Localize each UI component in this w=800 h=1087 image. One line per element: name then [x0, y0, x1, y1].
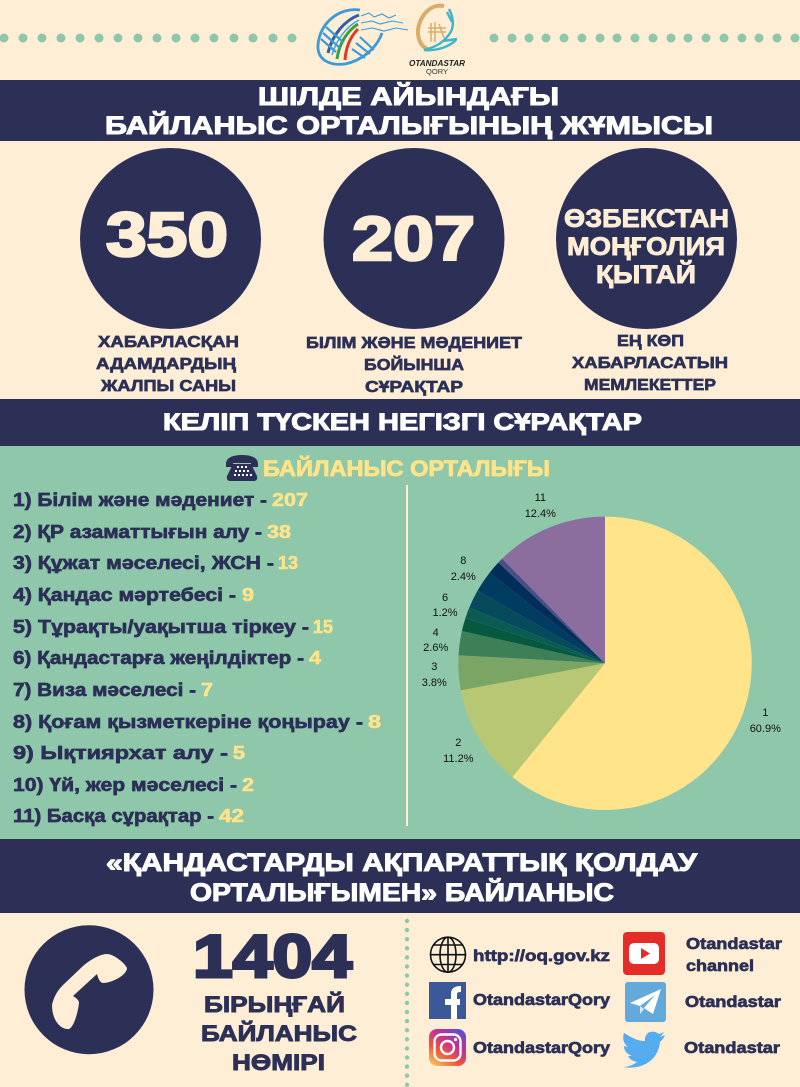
- pie chart: [422, 492, 781, 810]
- youtube handle: [686, 936, 782, 975]
- section banner: main questions: КЕЛІП ТҮСКЕН НЕГІЗГІ СҰРАҚТАР: [163, 409, 642, 436]
- title banner: [0, 80, 800, 141]
- title banner: БАЙЛАНЫС ОРТАЛЫҒЫНЫҢ ЖҰМЫСЫ: [105, 110, 713, 140]
- question list: 9) Ықтиярхат алу -: [13, 743, 228, 763]
- stat: 207: 207: [352, 205, 475, 274]
- logo: Otandastar Qory: QORY: [426, 67, 448, 76]
- pie labels: 2.6%: [423, 642, 448, 654]
- logo: Otandastar Qory: OTANDASTAR: [409, 59, 465, 68]
- icon: telephone: [226, 455, 258, 481]
- pie labels: [422, 492, 781, 765]
- stat label 3: ХАБАРЛАСАТЫН: [572, 355, 728, 372]
- hotline caption: НӨМІРІ: [232, 1050, 325, 1075]
- title line 1: ШІЛДЕ АЙЫНДАҒЫ: [258, 81, 559, 111]
- pie labels: 1.2%: [432, 607, 458, 619]
- question list: 5: [233, 743, 245, 763]
- stat label 2: БІЛІМ ЖӘНЕ МӘДЕНИЕТ: [306, 335, 522, 352]
- question list: 6) Қандастарға жеңілдіктер -: [13, 648, 304, 668]
- contact banner: ОРТАЛЫҒЫМЕН» БАЙЛАНЫС: [190, 877, 614, 907]
- icon: twitter: [623, 1032, 665, 1068]
- stat: countries: ҚЫТАЙ: [596, 259, 696, 289]
- question list: [13, 490, 381, 826]
- stat label 1: АДАМДАРДЫҢ: [96, 356, 237, 373]
- question list: 4) Қандас мәртебесі -: [13, 585, 236, 605]
- stat: countries: МОҢҒОЛИЯ: [567, 233, 725, 261]
- stat label 3: [572, 333, 728, 394]
- stat label 2: [306, 335, 522, 396]
- question list: 2: [242, 775, 254, 795]
- icon: globe: [430, 937, 466, 972]
- pie labels: 4: [433, 627, 439, 639]
- facebook handle: OtandastarQory: [473, 992, 610, 1009]
- logo: Otandastar Qory: [409, 6, 465, 76]
- question list: 42: [219, 806, 244, 826]
- icon: phone handset circle: [24, 925, 154, 1054]
- hotline caption: БІРЫҢҒАЙ: [204, 992, 345, 1017]
- stat label 1: ЖАЛПЫ САНЫ: [100, 378, 236, 395]
- telegram handle: Otandastar: [685, 994, 781, 1011]
- icon: instagram: [429, 1029, 466, 1066]
- question list: 8: [368, 712, 381, 732]
- question list: 38: [267, 522, 291, 542]
- stat label 3: ЕҢ КӨП: [617, 333, 684, 350]
- pie labels: 1: [762, 707, 768, 719]
- decorative vertical dotted line: [405, 921, 409, 1087]
- hotline caption: [201, 992, 357, 1075]
- pie labels: 11: [535, 492, 546, 504]
- youtube handle: channel: [686, 958, 754, 975]
- question list: 5) Тұрақты/уақытша тіркеу -: [13, 617, 309, 637]
- stat: countries: [556, 148, 737, 394]
- question list: 15: [313, 617, 333, 637]
- decorative dotted row left: [0, 34, 296, 42]
- question list: 10) Үй, жер мәселесі -: [13, 775, 237, 795]
- youtube handle: Otandastar: [686, 936, 782, 953]
- stat: countries: ӨЗБЕКСТАН: [564, 205, 729, 233]
- question list: 3) Құжат мәселесі, ЖСН -: [13, 553, 274, 573]
- twitter handle: Otandastar: [684, 1040, 780, 1057]
- pie labels: 60.9%: [750, 723, 781, 735]
- pie labels: 6: [442, 592, 448, 604]
- pie labels: 2: [455, 737, 461, 749]
- hotline number: 1404: [193, 923, 353, 990]
- icon: youtube: [623, 932, 665, 975]
- question list: 2) ҚР азаматтығын алу -: [13, 522, 262, 542]
- contact banner: [0, 839, 800, 913]
- icon: telegram: [625, 982, 666, 1022]
- pie labels: 12.4%: [525, 508, 556, 520]
- question list: 11) Басқа сұрақтар -: [13, 806, 214, 826]
- question list: 8) Қоғам қызметкеріне қоңырау -: [13, 712, 363, 732]
- stat: 207: [306, 148, 522, 396]
- question list: 207: [272, 490, 308, 510]
- panel heading: БАЙЛАНЫС ОРТАЛЫҒЫ: [263, 456, 550, 481]
- pie labels: 8: [460, 555, 466, 567]
- question list: 7) Виза мәселесі -: [13, 680, 196, 700]
- logo: ministry emblem: [318, 10, 408, 64]
- stat label 1: [96, 334, 239, 395]
- decorative dotted row right: [490, 34, 800, 42]
- question list: 9: [242, 585, 254, 605]
- pie labels: 2.4%: [451, 571, 476, 583]
- icon: facebook: [429, 982, 466, 1019]
- stat label 2: БОЙЫНША: [364, 355, 464, 374]
- question list: 1) Білім және мәдениет -: [13, 490, 267, 510]
- question list: 13: [278, 553, 298, 573]
- pie labels: 11.2%: [443, 753, 474, 765]
- instagram handle: OtandastarQory: [473, 1040, 610, 1057]
- stat label 3: МЕМЛЕКЕТТЕР: [584, 377, 716, 394]
- section banner: main questions: [0, 399, 800, 446]
- website link: http://oq.gov.kz: [473, 948, 610, 965]
- question list: 7: [201, 680, 213, 700]
- stat label 2: СҰРАҚТАР: [365, 379, 463, 396]
- pie labels: 3.8%: [422, 677, 447, 689]
- hotline caption: БАЙЛАНЫС: [201, 1021, 357, 1046]
- pie labels: 3: [431, 661, 437, 673]
- contact banner: «ҚАНДАСТАРДЫ АҚПАРАТТЫҚ ҚОЛДАУ: [106, 849, 698, 877]
- stat: 350: 350: [106, 201, 228, 270]
- stat label 1: ХАБАРЛАСҚАН: [98, 334, 239, 351]
- stat: 350: [80, 148, 261, 395]
- panel: contact center: [0, 446, 800, 839]
- question list: 4: [309, 648, 321, 668]
